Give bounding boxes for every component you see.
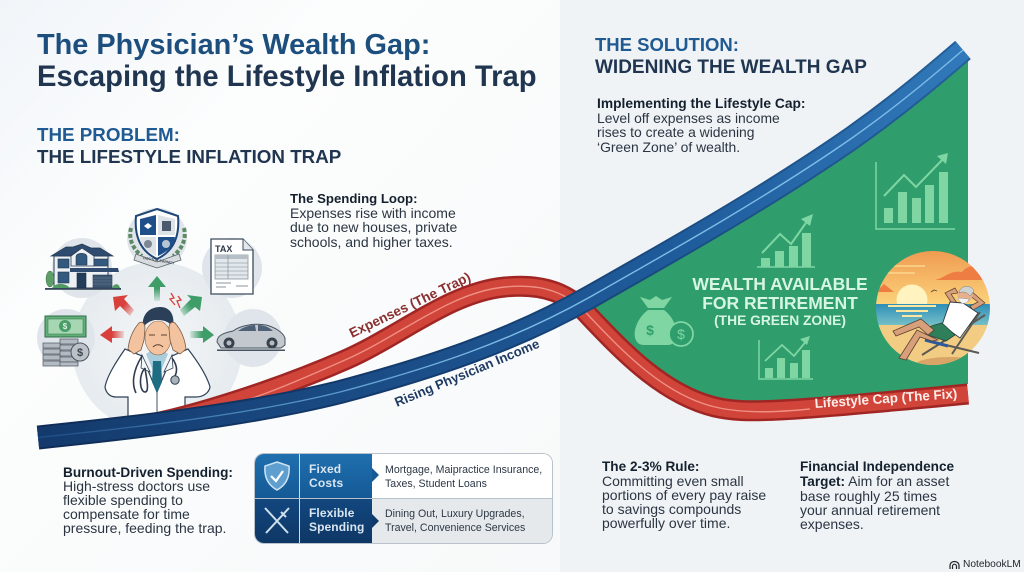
text: financial independence target: Target: Aim for an asset [800,473,949,489]
doctor figure [105,307,210,420]
icon: upper bar chart [876,153,955,229]
text: financial independence target: expenses. [800,516,864,532]
icon: retiree on beach [876,251,990,365]
icon: middle bar chart [757,214,815,267]
icon: tax form [211,239,253,294]
icon: car [217,324,285,351]
table: fixed costs and flexible spending [255,454,552,543]
background and chart [36,40,990,450]
row: flexible spending: Travel, Convenience Services [385,522,525,534]
text: the spending loop [290,191,457,250]
text: green zone label: FOR RETIREMENT [702,292,858,312]
title: The Physician’s Wealth Gap: [37,29,430,61]
text: burnout-driven spending: flexible spending to [63,492,183,508]
icon: cash and coins: $ [77,347,83,359]
text: the spending loop: The Spending Loop: [290,191,417,206]
curve labels: Rising Physician Income [392,336,541,410]
text: implementing the lifestyle cap: Implementing the Lifestyle Cap: [597,96,806,111]
text: financial independence target: base roughly 25 times [800,488,937,504]
text: implementing the lifestyle cap [597,96,806,155]
logo: NotebookLM: NotebookLM [963,559,1021,570]
text: financial independence target: Financial Independence [800,459,954,474]
text: the 2-3% rule: to savings compounds [602,501,741,517]
text: the 2-3% rule: powerfully over time. [602,515,730,531]
text: implementing the lifestyle cap: Level off expenses as income [597,110,780,126]
text: burnout-driven spending: High-stress doctors use [63,478,210,494]
text: the spending loop: due to new houses, private [290,219,457,235]
icon: shield crest [130,209,185,268]
text: burnout-driven spending: pressure, feeding the trap. [63,520,226,536]
text: financial independence target: your annual retirement [800,502,940,518]
title: Escaping the Lifestyle Inflation Trap [37,61,537,93]
icon: tax form: TAX [215,244,232,254]
heading: the problem: THE LIFESTYLE INFLATION TRAP [37,146,341,167]
text: burnout-driven spending: compensate for time [63,506,190,522]
row: flexible spending: Dining Out, Luxury Upgrades, [385,508,525,520]
heading: the solution: THE SOLUTION: [595,34,739,55]
text: green zone label [692,274,868,328]
text: the spending loop: schools, and higher taxes. [290,234,453,250]
heading: the problem: THE PROBLEM: [37,124,180,145]
icon: cash and coins [43,316,89,366]
icon: money bag [635,296,693,346]
illustration: burnout doctor and spending icons [37,208,285,432]
text: the 2-3% rule: Committing even small [602,473,744,489]
curve labels: Expenses (The Trap) [347,269,473,341]
curve labels: Lifestyle Cap (The Fix) [814,386,958,411]
arrows around doctor [100,276,214,343]
icon: house [45,244,121,290]
text: green zone label: (THE GREEN ZONE) [714,313,846,328]
row: flexible spending: Spending [309,520,364,534]
heading: the solution: WIDENING THE WEALTH GAP [595,57,867,78]
row: fixed costs: Fixed [309,462,341,476]
text: the 2-3% rule: portions of every pay raise [602,487,766,503]
icon: shield crest: DOCTOR EARNCY [143,256,175,266]
blue income curve [38,50,963,438]
red expenses curve [135,286,968,427]
text: financial independence target [800,459,954,532]
text: the 2-3% rule [602,459,766,531]
row: flexible spending [255,498,552,543]
icon: lower bar chart [759,336,813,379]
text: green zone label: WEALTH AVAILABLE [692,274,868,294]
row: fixed costs: Costs [309,476,343,490]
text: burnout-driven spending: Burnout-Driven Spending: [63,465,233,480]
icon: money bag: $ [646,322,654,338]
row: flexible spending: Flexible [309,506,354,520]
icon: money bag: $ [677,326,685,342]
row: fixed costs [255,454,552,498]
icon: cash and coins: $ [63,322,68,331]
text: implementing the lifestyle cap: rises to create a widening [597,124,755,140]
row: fixed costs: Mortgage, Maipractice Insurance, [385,464,542,476]
text: burnout-driven spending [63,465,233,536]
title [37,29,537,93]
green zone [584,58,968,405]
heading: the solution [595,34,867,78]
curve labels [347,269,958,411]
text: the 2-3% rule: The 2-3% Rule: [602,459,699,474]
text: implementing the lifestyle cap: ‘Green Zone’ of wealth. [597,139,740,155]
text: the spending loop: Expenses rise with income [290,205,456,221]
row: fixed costs: Taxes, Student Loans [385,478,487,490]
heading: the problem [37,124,341,167]
